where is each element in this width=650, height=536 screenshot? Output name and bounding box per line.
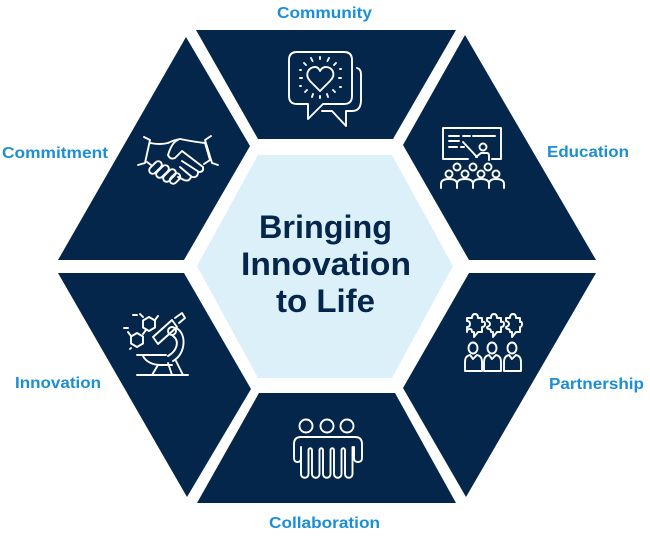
icon: three people together [294,420,362,478]
panel: education [403,35,596,260]
panel: commitment [58,37,250,260]
label: partnership: Partnership [549,376,644,393]
icon: teacher at board with audience [441,128,504,188]
label: education: Education [547,144,629,161]
icon: speech bubbles with heart [289,52,361,126]
title: to Life [276,283,375,319]
panel: collaboration [197,393,456,503]
label: community: Community [277,5,372,22]
label: collaboration: Collaboration [269,515,380,532]
title [241,209,411,319]
icon: puzzle pieces and people [465,314,522,371]
title: Bringing [259,209,392,245]
panel: community [196,30,456,139]
title: Innovation [241,246,411,282]
panel: partnership [403,273,596,497]
label: commitment: Commitment [2,145,109,162]
panel: innovation [58,273,251,497]
icon: microscope and molecules [124,313,188,375]
icon: handshake [138,136,218,185]
label: innovation: Innovation [15,375,101,392]
center hexagon [197,155,453,378]
